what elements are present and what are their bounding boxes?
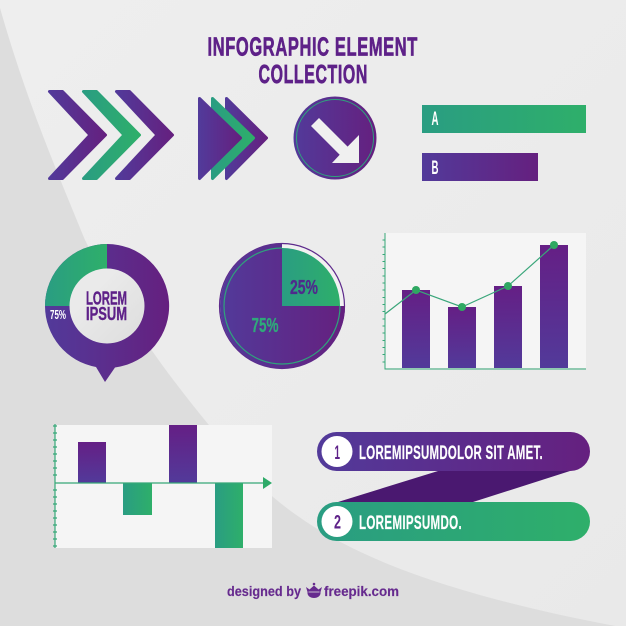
chart axes bbox=[382, 233, 586, 369]
bar: B bbox=[422, 153, 538, 181]
axes bbox=[53, 424, 264, 548]
pie chart: 25% bbox=[290, 277, 318, 299]
pill 2: LOREMIPSUMDO. bbox=[359, 512, 462, 534]
donut label bbox=[86, 288, 127, 324]
bar: A bbox=[422, 105, 586, 133]
pie chart bbox=[220, 244, 345, 368]
purple bars bbox=[78, 425, 197, 483]
title: INFOGRAPHIC ELEMENT bbox=[208, 32, 418, 62]
icon: circle arrow bbox=[294, 96, 376, 180]
title: COLLECTION bbox=[258, 59, 368, 89]
title bbox=[208, 32, 418, 89]
donut pin chart bbox=[45, 244, 169, 382]
pill 1 bbox=[317, 432, 590, 471]
chart bars bbox=[402, 245, 568, 368]
pill 2: 2 bbox=[334, 512, 341, 534]
bar: B: B bbox=[432, 158, 438, 179]
icon: triple chevrons bbox=[50, 92, 172, 178]
ribbon fold bbox=[338, 471, 570, 502]
arrowhead bbox=[263, 477, 272, 489]
bar and line chart bbox=[382, 233, 586, 369]
ribbon list bbox=[317, 432, 590, 541]
bar: A: A bbox=[432, 109, 439, 130]
positive and negative bar chart bbox=[53, 424, 272, 548]
footer credit bbox=[227, 583, 399, 599]
icon: overlapping triangles bbox=[200, 98, 266, 178]
trend line bbox=[385, 241, 558, 314]
donut label: LOREM bbox=[86, 288, 127, 308]
donut label: IPSUM bbox=[86, 303, 127, 324]
donut pin chart: 75% bbox=[50, 308, 66, 322]
icon: crown logo bbox=[306, 583, 322, 598]
pie chart: 75% bbox=[252, 315, 279, 337]
footer credit: designed by bbox=[227, 584, 301, 599]
green bars bbox=[123, 483, 243, 548]
pill 2 bbox=[317, 502, 590, 541]
pill 1: 1 bbox=[334, 442, 340, 464]
footer credit: freepik.com bbox=[324, 584, 399, 599]
